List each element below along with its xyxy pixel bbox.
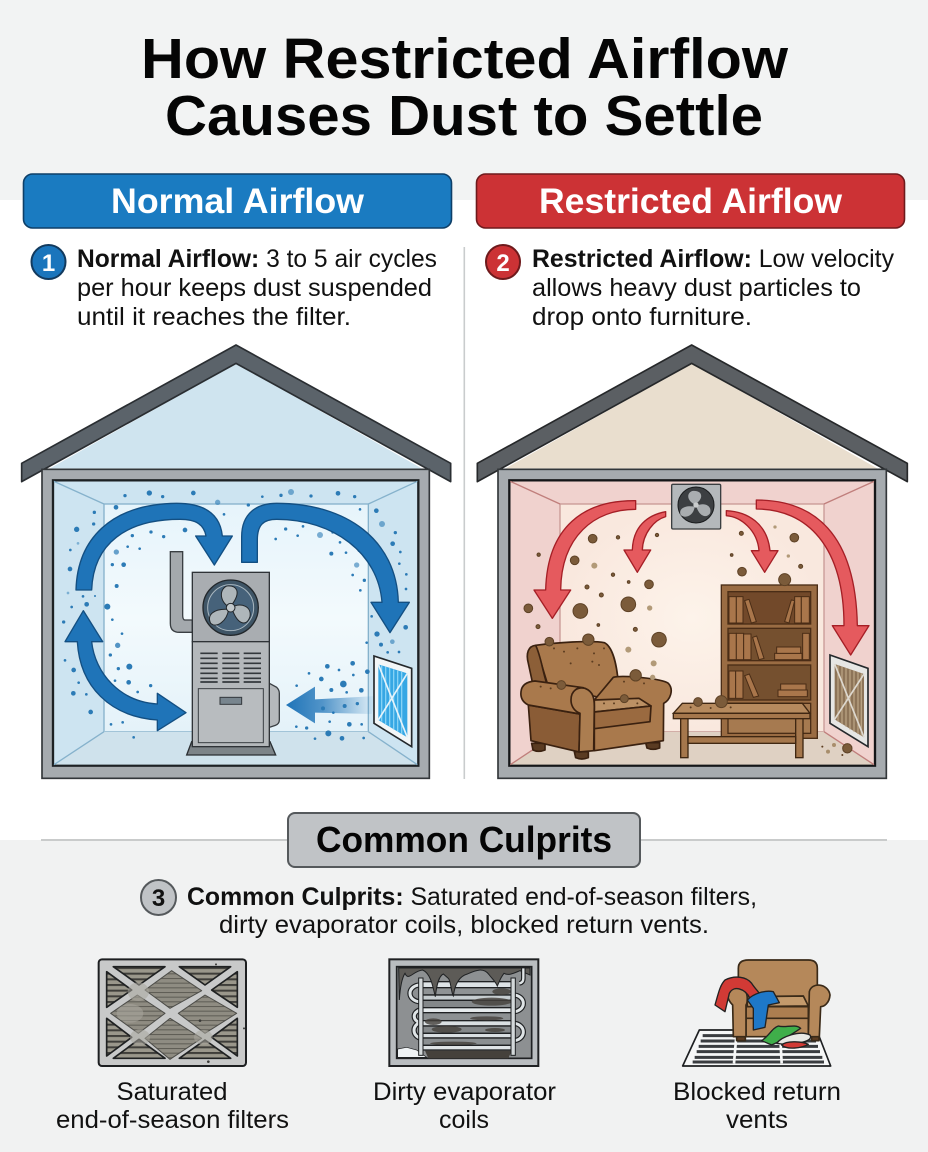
icon: saturated filter (99, 959, 246, 1066)
weak airflow arrows (534, 500, 869, 655)
badge 3: 3 (152, 885, 165, 912)
floor vent grille (683, 1030, 831, 1066)
caption: saturated filters: end-of-season filters (56, 1106, 289, 1134)
dust clumps (425, 988, 512, 1045)
title: Causes Dust to Settle (165, 84, 763, 148)
caption: blocked vents: vents (726, 1106, 788, 1134)
top crud with drips (399, 968, 530, 1000)
flue pipe (170, 552, 192, 632)
caption: blocked vents: Blocked return (673, 1078, 841, 1106)
badge 2: 2 (496, 250, 510, 277)
small armchair (727, 960, 830, 1041)
ceiling fan vent (672, 484, 721, 529)
caption: blocked vents (673, 1078, 841, 1134)
arrow: top left curving into furnace (76, 503, 232, 590)
title (141, 27, 789, 148)
panel: restricted airflow house (477, 345, 907, 778)
dirty filter (830, 655, 868, 747)
filter media panels (107, 967, 237, 1058)
heading: Normal Airflow (24, 174, 452, 228)
heading: Restricted Airflow (476, 174, 904, 228)
badge 3 (141, 880, 176, 915)
arrow: filter to furnace (286, 687, 377, 723)
badge 2 (486, 245, 520, 279)
badge 1: 1 (42, 250, 55, 277)
icon: blocked return vent (683, 960, 831, 1066)
title: How Restricted Airflow (141, 27, 789, 91)
caption: dirty coils: coils (439, 1106, 489, 1134)
caption: saturated filters: Saturated (116, 1078, 228, 1106)
piled clothes (715, 977, 811, 1048)
bookshelf (721, 585, 817, 738)
step 2 text block: drop onto furniture. (532, 303, 752, 331)
house shell (477, 345, 907, 778)
step 2 text block (486, 245, 894, 331)
step 1 text block: until it reaches the filter. (77, 303, 351, 331)
caption: dirty coils (373, 1078, 556, 1134)
suspended dust particles (62, 489, 408, 741)
settled dust specks (540, 647, 843, 756)
furnace unit (170, 552, 279, 755)
icon: dirty evaporator coil (389, 959, 538, 1066)
heading: Restricted Airflow: Restricted Airflow (539, 182, 843, 221)
clean filter (374, 656, 412, 747)
falling dust particles (524, 525, 852, 754)
step 3 text block: dirty evaporator coils, blocked return vents. (219, 911, 709, 939)
panel: normal airflow house (22, 345, 451, 778)
particles near filter (321, 702, 359, 710)
section heading: Common Culprits (41, 813, 887, 867)
furnace fan (203, 580, 258, 635)
house shell (22, 345, 451, 778)
U-bends (410, 985, 523, 1041)
step 1 text block (32, 245, 437, 331)
caption: saturated filters (56, 1078, 289, 1134)
step 1 text block: per hour keeps dust suspended (77, 274, 432, 302)
section heading: Common Culprits: Common Culprits (316, 819, 612, 860)
dust blotches (117, 982, 213, 1045)
step 2 text block: allows heavy dust particles to (532, 274, 861, 302)
step 2 text block: Restricted Airflow: Low velocity (532, 245, 894, 273)
heading: Normal Airflow: Normal Airflow (111, 182, 365, 221)
badge 1 (32, 245, 66, 279)
step 3 text block: Common Culprits: Saturated end-of-season filters, (187, 883, 757, 911)
caption: dirty coils: Dirty evaporator (373, 1078, 556, 1106)
arrow: double-headed left loop (65, 611, 186, 731)
furnace louvres (200, 653, 261, 682)
step 3 text block (141, 880, 757, 939)
armchair (521, 642, 671, 759)
coil bands (422, 982, 512, 1050)
arrow: top right curving toward filter (242, 503, 409, 633)
coffee table (673, 703, 810, 758)
step 1 text block: Normal Airflow: 3 to 5 air cycles (77, 245, 437, 273)
